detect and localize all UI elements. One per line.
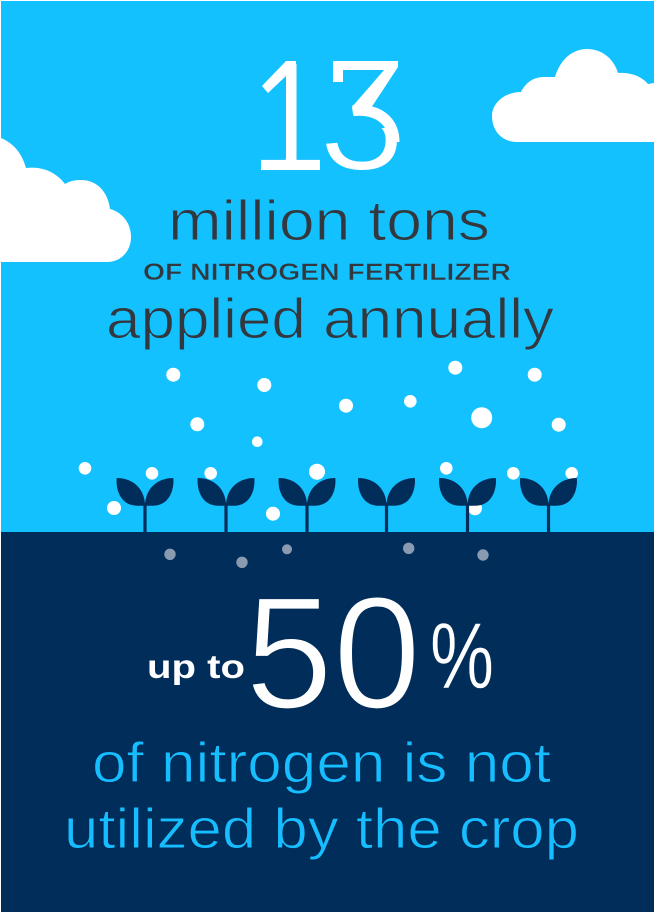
fertilizer granules above ground	[79, 361, 578, 521]
percent sign: %	[430, 603, 494, 708]
icon: left cloud	[1, 138, 131, 262]
panel: sky	[1, 1, 654, 532]
text: million tons: million tons	[168, 189, 490, 253]
panel: soil	[1, 532, 654, 912]
text: utilized by the crop: utilized by the crop	[64, 797, 579, 861]
big number: 50: 50	[245, 563, 421, 742]
fertilizer granules in soil	[164, 543, 489, 568]
text: of nitrogen fertilizer: OF NITROGEN FERTILIZER	[143, 259, 511, 286]
icon: right cloud	[492, 49, 654, 142]
icon: sprout row	[117, 478, 577, 532]
text: applied annually: applied annually	[106, 287, 555, 351]
text: of nitrogen is not: of nitrogen is not	[92, 731, 551, 795]
text: up to: up to	[147, 648, 245, 685]
big number: 13: 13	[245, 30, 405, 204]
